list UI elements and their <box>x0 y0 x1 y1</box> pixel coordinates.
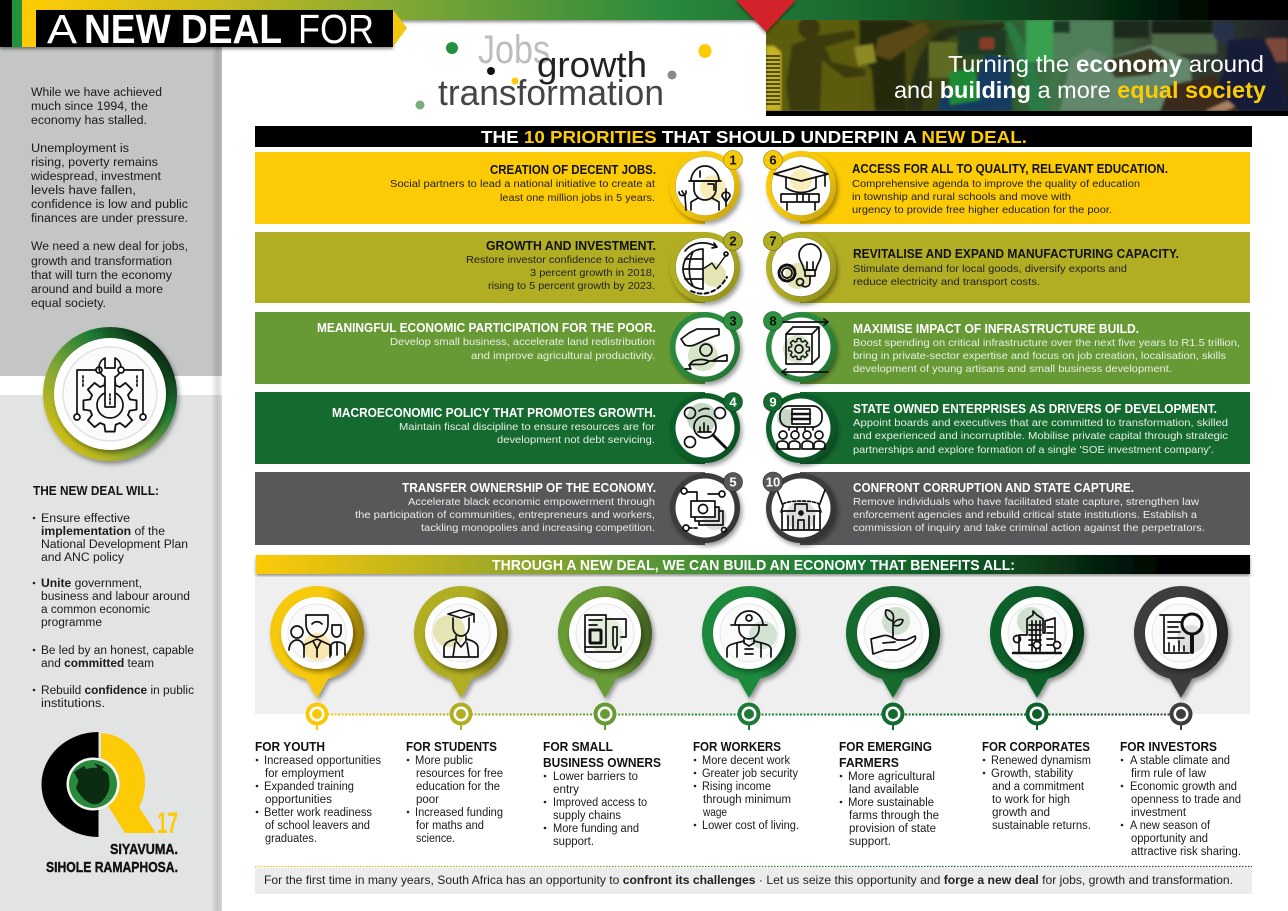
bullet list: a common economic <box>41 604 150 616</box>
priority 3 text: and improve agricultural productivity. <box>471 350 655 362</box>
icon: priority 7 bulb and gears <box>764 232 836 302</box>
column: for corporates: and a commitment <box>992 781 1085 793</box>
jobs growth transformation logo: Jobs <box>478 28 550 72</box>
column: for students <box>406 739 503 845</box>
priority 8 text: development of young artisans and small business development. <box>853 363 1172 375</box>
priority 7 text: Stimulate demand for local goods, diversify exports and <box>853 263 1127 275</box>
icon: priority 1 worker: 1 <box>729 152 737 168</box>
priority 1 text: CREATION OF DECENT JOBS. <box>490 163 656 177</box>
sidebar intro text: growth and transformation <box>31 256 172 268</box>
pin: small business <box>558 586 652 730</box>
bullet list: Rebuild confidence in public <box>41 685 194 697</box>
timeline node <box>882 702 904 730</box>
photo caption: Turning the economy around <box>948 51 1264 77</box>
priority 7 text <box>853 247 1179 288</box>
priority 6 text: ACCESS FOR ALL TO QUALITY, RELEVANT EDUCATION. <box>852 162 1168 176</box>
closing statement <box>255 866 1252 894</box>
column: for investors: opportunity and <box>1131 833 1208 845</box>
column: for students: poor <box>416 794 439 806</box>
icon: priority 6 graduate cap <box>764 150 836 221</box>
closing statement: For the first time in many years, South Africa has an opportunity to confront its challenges · Let us seize this opportunity and forge a new deal for jobs, growth and transformation. <box>264 873 1233 887</box>
priority 7 text: REVITALISE AND EXPAND MANUFACTURING CAPACITY. <box>853 247 1179 261</box>
sidebar intro text: finances are under pressure. <box>31 213 188 225</box>
priority 5 text <box>355 481 656 534</box>
column: for workers: FOR WORKERS <box>693 739 781 754</box>
CR17 logo <box>41 732 178 876</box>
photo caption <box>894 51 1266 103</box>
pin: corporates <box>990 586 1084 730</box>
jobs growth transformation logo <box>416 28 712 113</box>
column: for investors <box>1120 739 1241 858</box>
priority 2 text: Restore investor confidence to achieve <box>466 254 655 266</box>
title text: FOR <box>298 6 374 52</box>
priorities heading bar: THE 10 PRIORITIES THAT SHOULD UNDERPIN A NEW DEAL. <box>481 127 1027 147</box>
column: for workers: Rising income <box>702 781 771 793</box>
priority 3 text: MEANINGFUL ECONOMIC PARTICIPATION FOR THE POOR. <box>317 321 656 335</box>
icon: priority 4 magnifier: 4 <box>729 394 737 410</box>
sidebar intro text: much since 1994, the <box>31 101 148 113</box>
column: for corporates: FOR CORPORATES <box>982 739 1090 754</box>
priority 6 text: in township and rural schools and move with <box>852 191 1071 203</box>
bullet list: and ANC policy <box>41 552 124 564</box>
priority 2 text: rising to 5 percent growth by 2023. <box>488 280 655 292</box>
priority 8 text: Boost spending on critical infrastructure over the next five years to R1.5 trillion, <box>853 337 1240 349</box>
column: for emerging farmers: FARMERS <box>839 755 899 770</box>
pin: emerging farmers <box>846 586 940 730</box>
column: for small business owners: support. <box>553 836 594 848</box>
priority 5 text: Accelerate black economic empowerment through <box>408 496 655 508</box>
column: for corporates: Growth, stability <box>991 768 1073 780</box>
priority 10 text: enforcement agencies and rebuild critical state institutions. Establish a <box>853 509 1197 521</box>
column: for investors: openness to trade and <box>1131 794 1241 806</box>
priority 10 text: CONFRONT CORRUPTION AND STATE CAPTURE. <box>853 481 1134 495</box>
bullet list: business and labour around <box>41 591 190 603</box>
priority 4 text: MACROECONOMIC POLICY THAT PROMOTES GROWTH. <box>332 406 656 420</box>
column: for small business owners: Improved access to <box>553 797 647 809</box>
priority 1 text: Social partners to lead a national initiative to create at <box>390 178 655 190</box>
priority 4 text: development not debt servicing. <box>497 434 655 446</box>
timeline node <box>1026 702 1048 730</box>
jobs growth transformation logo: transformation <box>438 72 664 113</box>
timeline node <box>450 702 472 730</box>
bullet list: Be led by an honest, capable <box>41 645 194 657</box>
sidebar: the new deal will <box>33 484 194 710</box>
priority 2 text <box>466 239 656 292</box>
column: for students: education for the <box>416 781 500 793</box>
icon: priority 9 enterprises: 9 <box>769 394 777 410</box>
column: for corporates <box>982 739 1091 832</box>
column: for small business owners: supply chains <box>553 810 621 822</box>
column: for corporates: Renewed dynamism <box>991 755 1091 767</box>
sidebar intro text: equal society. <box>31 298 106 310</box>
priority 4 text: Maintain fiscal discipline to ensure resources are for <box>399 421 656 433</box>
column: for youth: of school leavers and <box>265 820 370 832</box>
priority 3 text: Develop small business, accelerate land redistribution <box>390 336 655 348</box>
bullet list <box>33 513 194 710</box>
priority 4 text <box>332 406 656 446</box>
column: for small business owners: BUSINESS OWNERS <box>543 755 661 770</box>
column: for workers: through minimum <box>703 794 791 806</box>
icon: priority 9 enterprises <box>764 392 836 463</box>
column: for workers: Greater job security <box>702 768 798 780</box>
pin: youth <box>270 586 364 730</box>
timeline node <box>306 702 328 730</box>
priority 9 text: STATE OWNED ENTERPRISES AS DRIVERS OF DEVELOPMENT. <box>853 402 1217 416</box>
icon: priority 8 infrastructure box: 8 <box>769 314 777 328</box>
column: for students: resources for free <box>416 768 503 780</box>
sidebar intro text: Unemployment is <box>31 143 129 155</box>
beneficiaries banner <box>256 555 1250 574</box>
pin: workers <box>702 586 796 730</box>
title banner <box>0 0 407 52</box>
beneficiaries banner: THROUGH A NEW DEAL, WE CAN BUILD AN ECONOMY THAT BENEFITS ALL: <box>492 557 1015 574</box>
priority 1 text: least one million jobs in 5 years. <box>500 192 655 204</box>
timeline node <box>594 702 616 730</box>
column: for emerging farmers: More agricultural <box>848 771 935 783</box>
column: for youth: Better work readiness <box>264 807 372 819</box>
priority 7 text: reduce electricity and transport costs. <box>853 276 1040 288</box>
priority 9 text: and experienced and incorruptible. Mobilise private capital through strategic <box>853 430 1228 442</box>
column: for youth: Increased opportunities <box>264 755 381 767</box>
column: for small business owners: Lower barriers to <box>553 771 638 783</box>
column: for workers: Lower cost of living. <box>702 820 799 832</box>
column: for emerging farmers: provision of state <box>849 823 936 835</box>
sidebar intro text: around and build a more <box>31 284 163 296</box>
icon: priority 1 worker <box>670 150 742 221</box>
sidebar: the new deal will: THE NEW DEAL WILL: <box>33 484 159 498</box>
column: for corporates: sustainable returns. <box>992 820 1091 832</box>
column: for workers <box>693 739 799 832</box>
priority 8 text: bring in private-sector expertise and focus on job creation, localisation, skills <box>853 350 1226 362</box>
column: for corporates: growth and <box>992 807 1050 819</box>
bullet list: Unite government, <box>41 578 142 590</box>
sidebar intro text: rising, poverty remains <box>31 157 158 169</box>
jobs growth transformation logo: growth <box>537 44 647 85</box>
priority 10 text: commission of inquiry and take criminal action against the perpetrators. <box>853 522 1205 534</box>
column: for investors: A stable climate and <box>1130 755 1230 767</box>
column: for small business owners: FOR SMALL <box>543 739 613 754</box>
icon: priority 3 hands: 3 <box>729 314 737 328</box>
icon: priority 5 money flow: 5 <box>729 474 737 490</box>
column: for emerging farmers: More sustainable <box>848 797 934 809</box>
icon: priority 10 state building: 10 <box>766 474 780 490</box>
priority 5 text: tackling monopolies and increasing competition. <box>421 522 655 534</box>
icon: priority 8 infrastructure box <box>764 312 836 382</box>
priority 5 text: the participation of communities, entrepreneurs and workers, <box>355 509 655 521</box>
column: for workers: More decent work <box>702 755 790 767</box>
priority bands <box>255 152 1250 545</box>
timeline node <box>738 702 760 730</box>
icon: priority 5 money flow <box>670 472 742 543</box>
icon: priority 2 growth globe: 2 <box>729 234 737 248</box>
column: for small business owners <box>543 739 661 848</box>
title text <box>47 6 374 52</box>
column: for students: Increased funding <box>415 807 503 819</box>
timeline node <box>1170 702 1192 730</box>
column: for youth: graduates. <box>265 833 317 845</box>
column: for emerging farmers <box>839 739 939 848</box>
CR17 logo: SIHOLE RAMAPHOSA. <box>46 859 178 876</box>
timeline dotted line <box>317 714 1181 716</box>
icon: priority 4 magnifier <box>670 392 742 463</box>
column: for youth: opportunities <box>265 794 332 806</box>
column: for students: science. <box>416 833 455 845</box>
column: for emerging farmers: farms through the <box>849 810 939 822</box>
column: for small business owners: More funding and <box>553 823 639 835</box>
priority 6 text: urgency to provide free higher education for the poor. <box>852 204 1112 216</box>
priority 9 text <box>853 402 1228 456</box>
column: for emerging farmers: land available <box>849 784 919 796</box>
priority 1 text <box>390 163 656 204</box>
priority 9 text: partnerships and explore formation of a single 'SOE investment company'. <box>853 444 1214 456</box>
priorities heading bar <box>255 126 1252 147</box>
sidebar intro text: confidence is low and public <box>31 199 188 211</box>
column: for investors: FOR INVESTORS <box>1120 739 1217 754</box>
priority 9 text: Appoint boards and executives that are committed to transformation, skilled <box>853 417 1228 429</box>
photo caption: and building a more equal society <box>894 77 1266 103</box>
priority 8 text <box>853 322 1240 375</box>
icon: priority 3 hands <box>670 312 742 382</box>
icon: priority 6 graduate cap: 6 <box>769 152 777 168</box>
sidebar intro text: We need a new deal for jobs, <box>31 241 188 253</box>
column: for students: for maths and <box>416 820 484 832</box>
column: for investors: attractive risk sharing. <box>1131 846 1241 858</box>
title text: NEW DEAL <box>84 6 282 52</box>
CR17 logo: SIYAVUMA. <box>110 841 178 858</box>
column: for emerging farmers: support. <box>849 836 891 848</box>
column: for investors: investment <box>1131 807 1187 819</box>
priority 5 text: TRANSFER OWNERSHIP OF THE ECONOMY. <box>402 481 656 495</box>
sidebar intro text: that will turn the economy <box>31 270 172 282</box>
bullet list: National Development Plan <box>41 539 188 551</box>
column: for corporates: to work for high <box>992 794 1070 806</box>
pin: investors <box>1134 586 1228 730</box>
column: for youth: for employment <box>265 768 345 780</box>
sidebar intro text: While we have achieved <box>31 87 162 99</box>
bullet list: and committed team <box>41 658 154 670</box>
red triangle <box>736 0 796 32</box>
column: for small business owners: entry <box>553 784 579 796</box>
priority 2 text: 3 percent growth in 2018, <box>530 267 655 279</box>
priority 8 text: MAXIMISE IMPACT OF INFRASTRUCTURE BUILD. <box>853 322 1139 336</box>
priority 6 text: Comprehensive agenda to improve the quality of education <box>852 178 1140 190</box>
column: for investors: A new season of <box>1130 820 1211 832</box>
priority 10 text <box>853 481 1205 534</box>
column: for investors: Economic growth and <box>1130 781 1237 793</box>
column: for workers: wage <box>702 807 727 819</box>
bullet list: institutions. <box>41 698 105 710</box>
bullet list: implementation of the <box>41 526 165 538</box>
column: for students: More public <box>415 755 473 767</box>
priority 6 text <box>852 162 1168 216</box>
column: for emerging farmers: FOR EMERGING <box>839 739 932 754</box>
sidebar intro text: levels have fallen, <box>31 185 136 197</box>
sidebar intro text: economy has stalled. <box>31 115 147 127</box>
column: for youth <box>255 739 381 845</box>
priority 10 text: Remove individuals who have facilitated state capture, strengthen law <box>853 496 1199 508</box>
sidebar intro text: widespread, investment <box>30 171 162 183</box>
top gradient bar <box>0 0 1288 20</box>
column: for youth: FOR YOUTH <box>255 739 325 754</box>
icon: wrench and gear badge <box>43 327 177 461</box>
pin: students <box>414 586 508 730</box>
priority 2 text: GROWTH AND INVESTMENT. <box>486 239 656 253</box>
CR17 logo: 17 <box>157 807 178 840</box>
priority 3 text <box>317 321 656 362</box>
sidebar intro text <box>30 87 188 310</box>
column: for youth: Expanded training <box>264 781 354 793</box>
title text: A <box>47 6 78 52</box>
beneficiaries grey panel <box>255 577 1250 714</box>
photo banner <box>766 17 1288 116</box>
icon: priority 2 growth globe <box>670 232 742 302</box>
icon: priority 7 bulb and gears: 7 <box>769 234 777 248</box>
panel: left sidebar <box>0 40 222 911</box>
column: for investors: firm rule of law <box>1131 768 1207 780</box>
bullet list: Ensure effective <box>41 513 130 525</box>
column: for students: FOR STUDENTS <box>406 739 497 754</box>
icon: priority 10 state building <box>763 472 836 543</box>
bullet list: programme <box>41 617 102 629</box>
